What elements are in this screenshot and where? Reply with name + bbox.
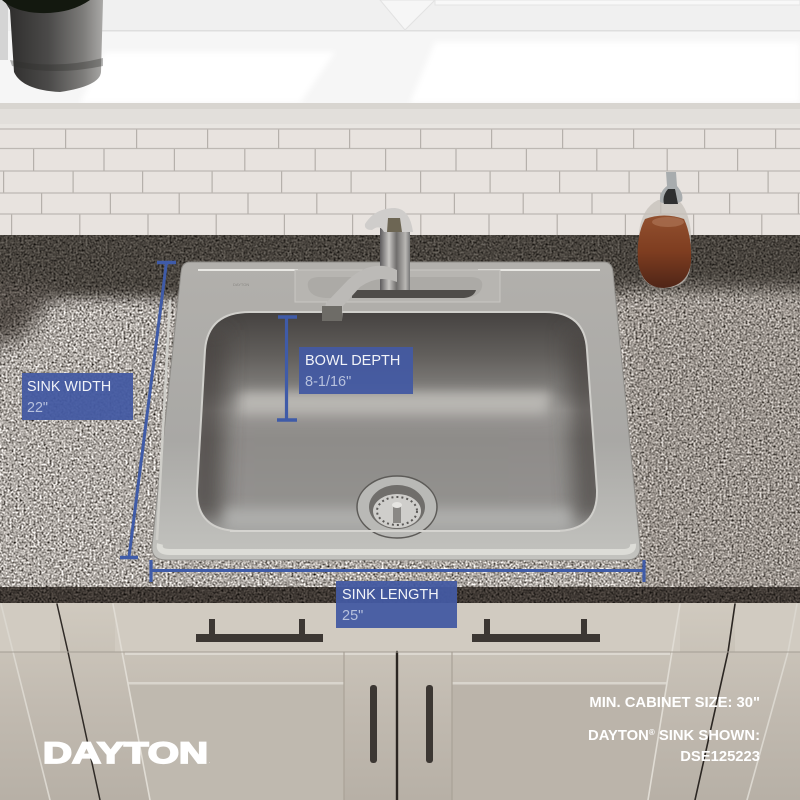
Dayton logo: DAYTON <box>43 737 208 770</box>
bowl depth label: BOWL DEPTH <box>305 353 400 369</box>
bottle glass <box>639 200 691 288</box>
window sill background <box>0 0 800 106</box>
cabinet size and model note: DAYTON <box>588 728 649 744</box>
faucet handle <box>365 208 413 232</box>
Dayton logo: . <box>209 759 210 765</box>
granite countertop <box>0 235 800 587</box>
bowl depth label: 8-1/16" <box>305 374 351 390</box>
cabinet size and model note: SINK SHOWN: <box>655 728 760 744</box>
sink length label: 25" <box>342 608 363 624</box>
cabinet size and model note: MIN. CABINET SIZE: 30" <box>589 695 760 711</box>
faucet deck recess <box>295 270 500 302</box>
door panels <box>128 682 667 800</box>
bottle liquid <box>638 216 691 288</box>
backsplash subway tiles <box>0 129 800 236</box>
cabinets <box>0 603 800 800</box>
bowl <box>197 312 597 531</box>
sink width label: 22" <box>27 400 48 416</box>
sink <box>152 262 640 560</box>
sink width dimension line <box>120 262 176 558</box>
bottle pump <box>660 172 682 204</box>
sink rim <box>152 262 640 560</box>
bowl depth label <box>299 347 413 394</box>
cabinet size and model note: ® <box>649 728 655 737</box>
faucet stem <box>380 228 410 290</box>
brand mark on rim: DAYTON <box>233 282 249 287</box>
sink width label: SINK WIDTH <box>27 379 111 395</box>
soap bottle <box>638 172 691 288</box>
cabinet size and model note: DSE125223 <box>680 749 760 765</box>
bowl edge <box>197 312 597 531</box>
drain <box>357 476 437 538</box>
sink width label <box>22 373 133 420</box>
bowl shading <box>185 330 610 530</box>
sink length label: SINK LENGTH <box>342 587 439 603</box>
vertical door handles <box>370 685 433 763</box>
backsplash ledge <box>0 103 800 130</box>
sink length dimension line <box>151 560 644 582</box>
countertop front edge <box>0 587 800 604</box>
right drawer handle <box>472 619 600 642</box>
sink length label <box>336 581 457 628</box>
cabinet size and model note <box>588 695 760 765</box>
spout <box>322 266 397 320</box>
left drawer handle <box>196 619 323 642</box>
bowl depth dimension line <box>277 317 297 420</box>
faucet <box>308 208 482 321</box>
drawer front rail <box>0 604 800 655</box>
plant pot <box>0 0 103 92</box>
redraw bowl bottom edge over drain <box>230 530 560 532</box>
deck plate <box>308 277 482 298</box>
